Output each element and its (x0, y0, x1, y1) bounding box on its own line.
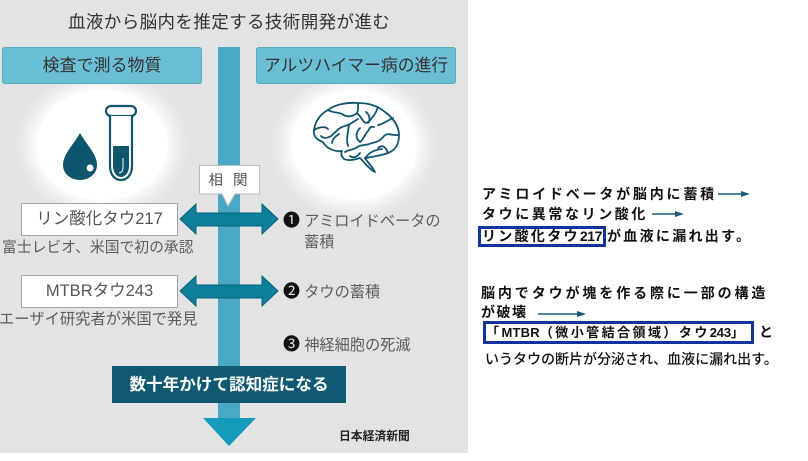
note 1 line 3: リン酸化タウ217 (482, 228, 602, 244)
label: MTBR tau 243 (21, 275, 178, 308)
heading: Alzheimer's progression (256, 47, 456, 84)
note 2 line 2: が破壊 (481, 304, 528, 320)
note 2 line 4: いうタウの断片が分泌され、血液に漏れ出す。 (485, 351, 778, 367)
step 2 text: ❷ タウの蓄積 (283, 282, 380, 301)
heading: measured substances (2, 47, 202, 84)
banner: leads to dementia over decades: 数十年かけて認知症になる (129, 375, 329, 394)
icon: brain (312, 102, 400, 173)
icon: white glow behind brain (291, 90, 417, 200)
source credit: 日本経済新聞 (339, 429, 410, 443)
callout: correlation (199, 165, 260, 207)
note 2 line 1: 脳内でタウが塊を作る際に一部の構造 (481, 285, 768, 301)
banner: leads to dementia over decades (112, 366, 346, 403)
arrow note 2 (538, 311, 586, 317)
note 1 line 3 continued: が血液に漏れ出す。 (607, 228, 752, 244)
arrow note 1b (652, 211, 684, 217)
note 1 line 1: アミロイドベータが脳内に蓄積 (482, 186, 717, 202)
text: Fujirebio approval: 富士レビオ、米国で初の承認 (2, 240, 193, 256)
step 1 text: ❶ アミロイドベータの 蓄積 (283, 211, 441, 251)
step 3 text: ❸ 神経細胞の死滅 (283, 335, 411, 354)
label: MTBR tau 243: MTBRタウ243 (46, 282, 153, 300)
arrow note 1a (718, 191, 750, 197)
note 1 line 2: タウに異常なリン酸化 (482, 206, 648, 222)
heading: Alzheimer's progression: アルツハイマー病の進行 (264, 56, 448, 75)
icon: blood drop (63, 133, 97, 180)
heading: measured substances: 検査で測る物質 (42, 56, 162, 75)
highlight box: p-tau 217 (478, 226, 606, 247)
title: 血液から脳内を推定する技術開発が進む (68, 12, 390, 32)
central timeline bar (218, 47, 240, 422)
note 2 line 3 end: と (759, 324, 773, 340)
callout: correlation: 相 関 (208, 172, 251, 189)
icon: test tube (104, 104, 138, 182)
label: phosphorylated tau 217 (21, 203, 178, 236)
double arrow 1 (179, 203, 279, 235)
down arrow head (203, 418, 256, 446)
icon: white glow behind blood and tube (36, 90, 168, 200)
panel: infographic background (0, 0, 468, 453)
label: phosphorylated tau 217: リン酸化タウ217 (36, 210, 163, 228)
text: Eisai discovery: エーザイ研究者が米国で発見 (0, 311, 198, 328)
double arrow 2 (179, 275, 279, 307)
note 2 line 3: 「MTBR（微小管結合領域）タウ243」 (486, 325, 746, 340)
highlight box: MTBR tau 243 (483, 321, 754, 344)
